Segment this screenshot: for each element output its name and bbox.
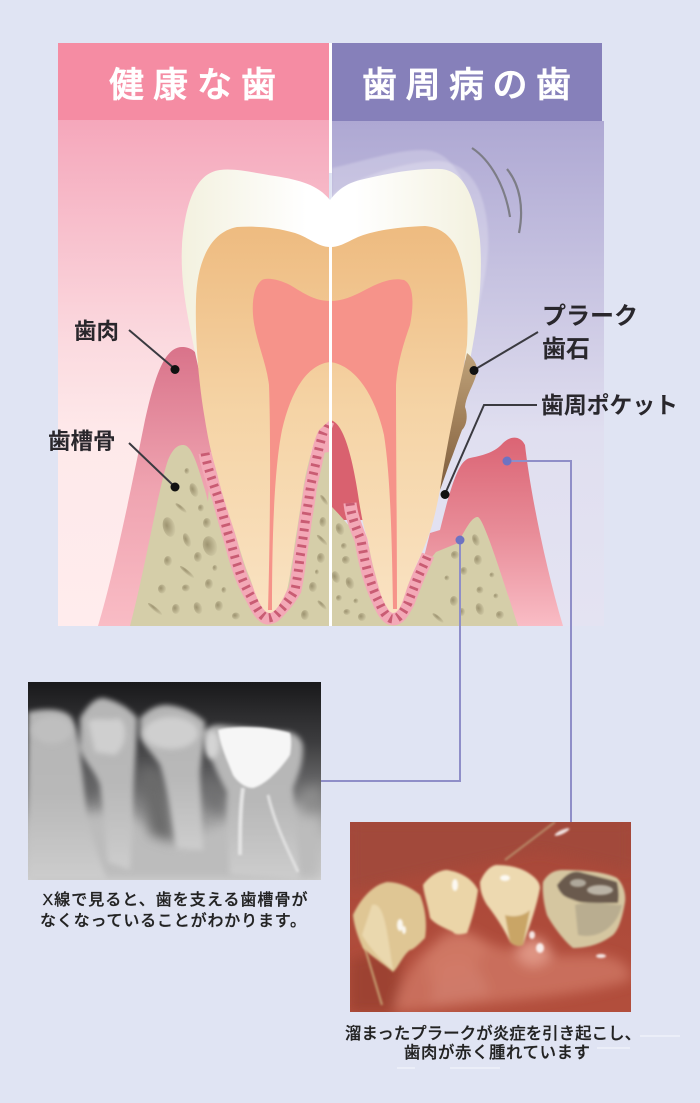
caption: x-ray: X線で見ると、歯を支える歯槽骨が bbox=[42, 890, 308, 909]
x-ray crowns bbox=[32, 716, 219, 759]
connector: x-ray to gum bbox=[321, 536, 464, 781]
caption: x-ray: なくなっていることがわかります。 bbox=[40, 911, 306, 930]
periodontal ligament: right root bbox=[350, 503, 428, 619]
background: disease side bbox=[332, 121, 604, 626]
photo: highlights bbox=[397, 827, 613, 958]
label: plaque and calculus: プラーク bbox=[542, 303, 638, 330]
gum: receded and inflamed bbox=[422, 438, 563, 626]
label: plaque and calculus bbox=[470, 303, 638, 375]
periodontal ligament: left root bbox=[205, 421, 328, 618]
label: periodontal pocket: 歯周ポケット bbox=[541, 392, 678, 418]
label: alveolar bone: 歯槽骨 bbox=[48, 429, 116, 454]
x-ray teeth bbox=[28, 698, 303, 880]
label: gum: 歯肉 bbox=[74, 319, 119, 344]
enamel bbox=[182, 169, 481, 375]
panel: tooth comparison diagram bbox=[58, 43, 604, 626]
header: healthy tooth bbox=[58, 43, 329, 120]
header: periodontal disease tooth: 歯周病の歯 bbox=[362, 66, 580, 105]
ghost tooth: wobbling outline bbox=[332, 150, 488, 320]
tooth bbox=[182, 169, 481, 613]
gum: furcation inflamed bbox=[332, 420, 362, 520]
icon: wobble lines bbox=[472, 148, 521, 233]
x-ray dark pockets bbox=[84, 760, 222, 843]
dentin and roots bbox=[196, 226, 468, 613]
background: healthy side bbox=[58, 120, 329, 626]
x-ray metal restoration bbox=[218, 727, 298, 872]
caption: photo: 溜まったプラークが炎症を引き起こし、 bbox=[345, 1024, 641, 1043]
pulp bbox=[253, 279, 412, 610]
label: periodontal pocket bbox=[440, 392, 678, 499]
plaque and calculus bbox=[440, 353, 477, 490]
caption: photo: 歯肉が赤く腫れています bbox=[404, 1043, 590, 1062]
label: gum bbox=[74, 319, 180, 374]
center divider bbox=[329, 245, 332, 626]
caption: x-ray bbox=[40, 890, 308, 930]
gum: healthy bbox=[98, 347, 216, 626]
photo: upper and lower gum tones bbox=[350, 863, 631, 1012]
header: healthy tooth: 健康な歯 bbox=[109, 66, 285, 105]
label: alveolar bone bbox=[48, 429, 180, 492]
label: plaque and calculus: 歯石 bbox=[542, 336, 590, 363]
connector: photo to gum bbox=[502, 456, 571, 822]
photo: inflamed gums bbox=[350, 822, 631, 1012]
caption: photo bbox=[345, 1024, 641, 1062]
bone pores bbox=[147, 468, 504, 624]
header: periodontal disease tooth bbox=[332, 43, 602, 121]
photo: dental x-ray bbox=[28, 682, 321, 880]
photo: dental floss line bbox=[505, 822, 555, 860]
photo: teeth bbox=[353, 865, 625, 972]
x-ray bone bbox=[86, 783, 321, 880]
alveolar bone: healthy side bbox=[130, 445, 208, 626]
